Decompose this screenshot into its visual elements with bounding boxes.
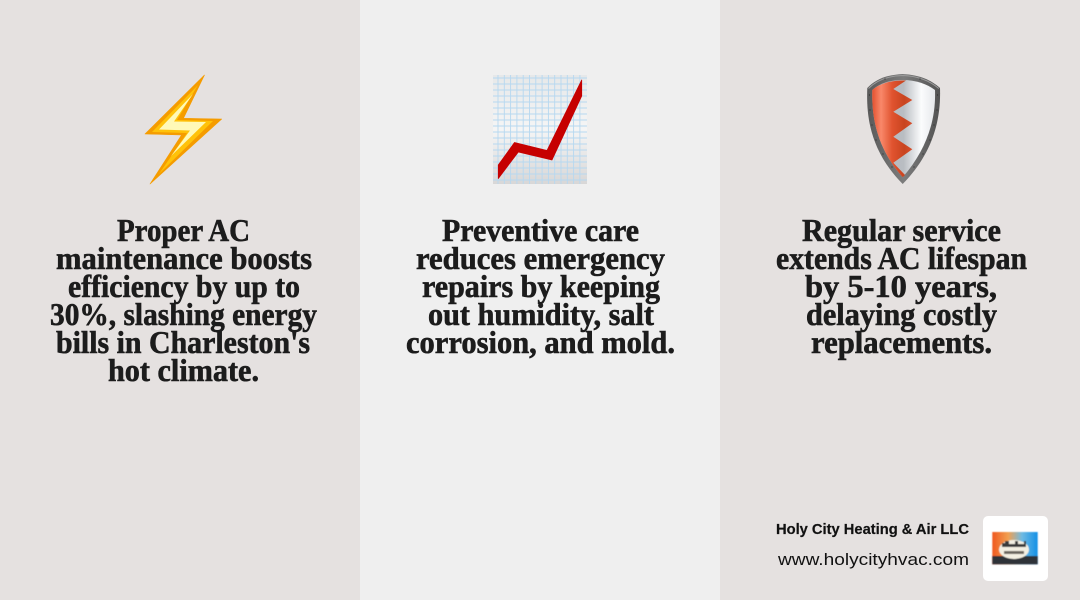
heading: lifespan text: Regular service	[802, 212, 1001, 248]
panel: emergency repairs	[360, 0, 720, 600]
heading: repairs text	[406, 212, 675, 360]
logo	[983, 516, 1048, 581]
icon: lightning bolt	[145, 75, 222, 184]
heading: lifespan text: delaying costly	[806, 296, 997, 332]
panel: lifespan	[720, 0, 1080, 600]
heading: efficiency text: 30%, slashing energy	[50, 296, 317, 332]
heading: efficiency text	[50, 212, 317, 388]
heading: repairs text: out humidity, salt	[428, 296, 654, 332]
heading: lifespan text: extends AC lifespan	[776, 240, 1027, 276]
icon: rising chart	[493, 75, 587, 184]
panel: efficiency	[0, 0, 360, 600]
text: company name: Holy City Heating & Air LLC	[776, 522, 970, 538]
heading: lifespan text: replacements.	[811, 324, 992, 360]
heading: repairs text: reduces emergency	[416, 240, 665, 276]
text: website: www.holycityhvac.com	[777, 550, 969, 569]
heading: lifespan text	[776, 212, 1027, 360]
heading: repairs text: Preventive care	[442, 212, 639, 248]
heading: efficiency text: maintenance boosts	[56, 240, 312, 276]
heading: efficiency text: Proper AC	[117, 212, 250, 248]
heading: efficiency text: efficiency by up to	[68, 268, 300, 304]
heading: repairs text: corrosion, and mold.	[406, 324, 675, 360]
heading: efficiency text: bills in Charleston's	[56, 324, 310, 360]
heading: lifespan text: by 5-10 years,	[805, 268, 997, 304]
heading: repairs text: repairs by keeping	[422, 268, 660, 304]
heading: efficiency text: hot climate.	[108, 352, 259, 388]
icon: shield	[867, 74, 940, 184]
